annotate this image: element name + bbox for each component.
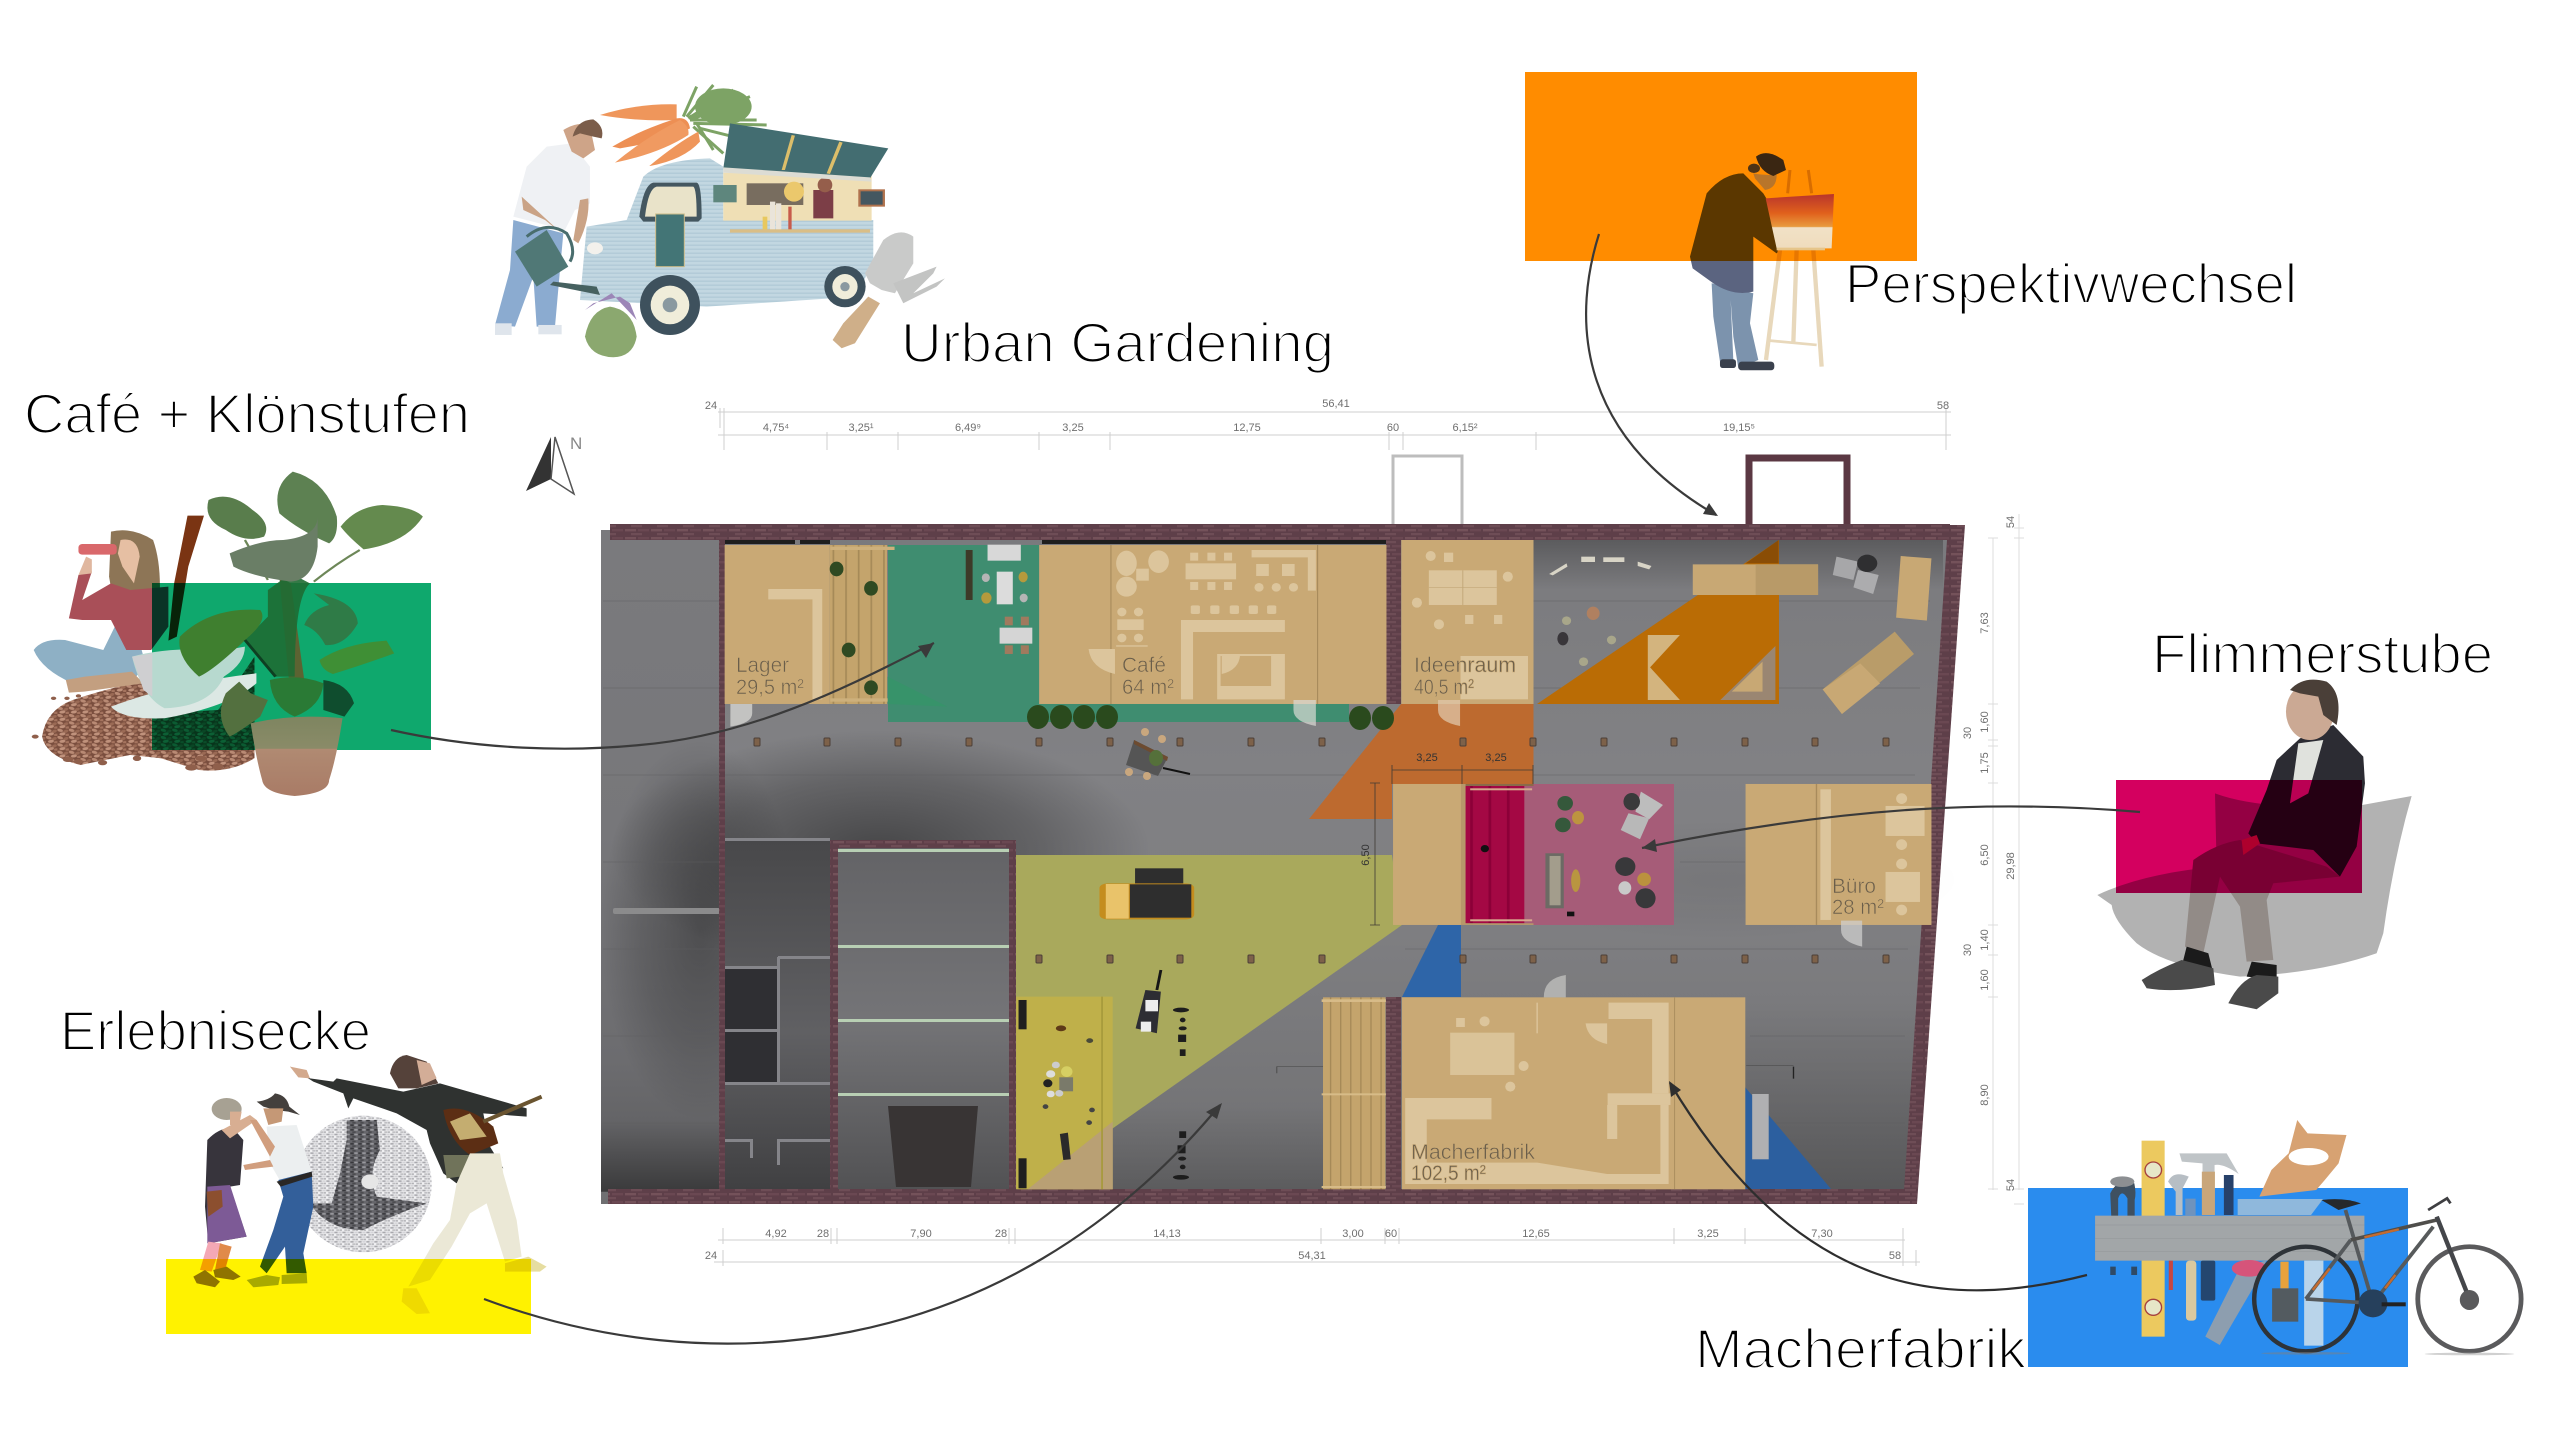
dimension lines east: 29,98	[2005, 852, 2017, 880]
man on beanbag	[2097, 680, 2412, 1009]
zone: pink Flimmerstube	[1524, 784, 1674, 925]
dimension lines north: 24	[705, 400, 717, 412]
dimension lines east: 30	[1962, 727, 1974, 739]
dimension lines north: 12,75	[1233, 422, 1261, 434]
dimension lines north: 58	[1937, 400, 1949, 412]
label: Lager: Lager	[736, 654, 789, 677]
heading: Cafe + Kloenstufen: Café + Klönstufen	[24, 382, 470, 445]
heading: Erlebnisecke: Erlebnisecke	[60, 999, 371, 1062]
dimension lines south: 28	[817, 1228, 829, 1240]
Flimmerstube box and furniture	[1393, 784, 1663, 925]
zone: blue Macherfabrik yard	[1745, 1087, 1831, 1189]
left exterior strip	[601, 541, 721, 1191]
carrots	[600, 85, 767, 166]
dimension lines north	[705, 398, 1951, 450]
collage: Erlebnisecke	[166, 1055, 547, 1334]
arrow: Flimmerstube to pink zone	[1642, 806, 2140, 848]
dimension lines east: 54	[2005, 1179, 2017, 1191]
room: Lager with steps	[725, 545, 895, 727]
dimension lines south: 24	[705, 1250, 717, 1262]
garden tools	[833, 232, 945, 348]
floor plan	[600, 398, 2024, 1266]
dimension lines east: 7,63	[1979, 612, 1991, 634]
arrow: Cafe to green zone	[391, 643, 934, 749]
photo: cup and plant	[111, 472, 423, 796]
arrow: Macherfabrik to box	[1670, 1083, 2087, 1290]
dimension lines south: 58	[1889, 1250, 1901, 1262]
man with watering can	[495, 119, 602, 335]
collage: Macherfabrik	[2028, 1120, 2521, 1367]
woman dancer	[205, 1128, 247, 1243]
compass north arrow: N	[570, 434, 582, 453]
collage: Cafe + Kloenstufen	[32, 472, 431, 796]
dimension lines south: 7,30	[1811, 1228, 1833, 1240]
inner service rooms	[613, 838, 1009, 1190]
heading: Urban Gardening: Urban Gardening	[901, 311, 1334, 374]
label: Macherfabrik: Macherfabrik	[1411, 1141, 1535, 1164]
wheelbarrow	[1125, 728, 1190, 780]
dimension lines north: 60	[1387, 422, 1399, 434]
Perspektivwechsel room furniture	[1549, 540, 1931, 714]
bicycle	[2254, 1198, 2521, 1355]
dimension lines south: 3,25	[1697, 1228, 1719, 1240]
dimension lines east: 54	[2005, 516, 2017, 528]
label: Lager area: 29,5 m²	[736, 676, 804, 699]
dimension lines north: 4,75⁴	[763, 422, 789, 434]
painter body	[1690, 170, 1822, 370]
zone: blue Macherfabrik entry	[1402, 925, 1461, 997]
colour block: yellow	[166, 1259, 531, 1334]
dimension lines north: 3,25¹	[848, 422, 874, 434]
heading: Flimmerstube: Flimmerstube	[2152, 622, 2493, 685]
label: Cafe: Café	[1122, 654, 1166, 677]
arrowhead: Cafe	[918, 643, 934, 658]
cafe terrace furniture	[888, 545, 1032, 707]
food truck	[580, 123, 888, 335]
building floor slab	[601, 530, 1950, 1204]
room: Cafe	[1039, 545, 1386, 726]
collage: Perspektivwechsel	[1525, 72, 1917, 370]
bushes	[1027, 705, 1394, 730]
tool rack	[2095, 1120, 2364, 1346]
inner dimension annotations	[1360, 752, 1533, 925]
room: Buero	[1746, 784, 1931, 947]
label: Buero: Büro	[1832, 875, 1876, 898]
zone: orange Perspektivwechsel	[1537, 540, 1779, 704]
arrowhead: Perspektivwechsel	[1703, 503, 1718, 516]
dimension lines south: 28	[995, 1228, 1007, 1240]
tools and bicycle	[2095, 1120, 2521, 1355]
room: Ideenraum	[1401, 540, 1534, 726]
label: Macherfabrik area: 102,5 m²	[1411, 1162, 1486, 1185]
man dancer	[257, 1093, 300, 1115]
inner dimension annotations: 3,25	[1416, 752, 1438, 764]
dimension lines east	[1962, 514, 2024, 1204]
compass north arrow	[526, 434, 582, 494]
colour block: orange	[1525, 72, 1917, 261]
columns	[754, 738, 1889, 963]
yellow Erlebnisecke stage and food truck	[1016, 868, 1326, 1189]
dimension lines south: 7,90	[910, 1228, 932, 1240]
dimension lines south: 12,65	[1522, 1228, 1550, 1240]
door extensions north	[1393, 456, 1847, 524]
dimension lines south: 3,00	[1342, 1228, 1364, 1240]
guitarist	[290, 1067, 527, 1183]
dimension lines north: 6,49⁹	[955, 422, 981, 434]
label: Cafe area: 64 m²	[1122, 676, 1174, 699]
arrowhead: Erlebnisecke	[1206, 1103, 1222, 1119]
dimension lines east: 1,75	[1979, 752, 1991, 774]
dancers, disco ball and guitarist	[193, 1055, 547, 1314]
dimension lines south: 4,92	[765, 1228, 787, 1240]
zone: orange Ideenraum	[1309, 704, 1534, 819]
dimension lines north: 19,15⁵	[1723, 422, 1755, 434]
black gaps below top wall	[725, 540, 1386, 544]
collage: Flimmerstube	[2097, 680, 2412, 1009]
zone: yellow Erlebnisecke	[1016, 855, 1402, 1189]
room: Macherfabrik	[1322, 975, 1793, 1189]
heading: Perspektivwechsel: Perspektivwechsel	[1845, 252, 2297, 315]
dimension lines east: 1,40	[1979, 929, 1991, 951]
colour block: green	[152, 583, 431, 750]
inner dimension annotations: 6,50	[1360, 844, 1372, 866]
dimension lines east: 1,60	[1979, 711, 1991, 733]
dimension lines east: 1,60	[1979, 969, 1991, 991]
dimension lines south	[705, 1228, 1920, 1266]
dimension lines south: 54,31	[1298, 1250, 1326, 1262]
colour block: pink	[2116, 780, 2362, 893]
label: Ideenraum area: 40,5 m²	[1414, 676, 1474, 699]
dimension lines north: 6,15²	[1452, 422, 1478, 434]
heading: Macherfabrik: Macherfabrik	[1695, 1317, 2027, 1380]
dimension lines north: 56,41	[1322, 398, 1350, 410]
dimension lines east: 8,90	[1979, 1084, 1991, 1106]
inner dimension annotations: 3,25	[1485, 752, 1507, 764]
dimension lines south: 14,13	[1153, 1228, 1181, 1240]
arrow: Perspektivwechsel to orange zone	[1586, 234, 1716, 515]
zone: green cafe	[888, 545, 1349, 722]
painter head and canvas	[1748, 153, 1834, 250]
arrowhead: Macherfabrik	[1669, 1081, 1681, 1097]
label: Ideenraum: Ideenraum	[1414, 654, 1516, 677]
arrow: Erlebnisecke to yellow zone	[484, 1105, 1220, 1344]
collage: Urban Gardening	[495, 85, 945, 357]
label: Buero area: 28 m²	[1832, 896, 1884, 919]
floor shading	[600, 540, 1960, 1192]
dimension lines south: 60	[1385, 1228, 1397, 1240]
dimension lines east: 6,50	[1979, 844, 1991, 866]
dimension lines east: 30	[1962, 944, 1974, 956]
dark trapezoid stage	[888, 1106, 978, 1187]
colour block: blue	[2028, 1188, 2408, 1367]
brick walls	[608, 524, 1965, 1204]
photo: woman and coffee	[32, 516, 254, 771]
arrowhead: Flimmerstube	[1642, 839, 1657, 852]
dimension lines north: 3,25	[1062, 422, 1084, 434]
lavender	[585, 293, 637, 357]
